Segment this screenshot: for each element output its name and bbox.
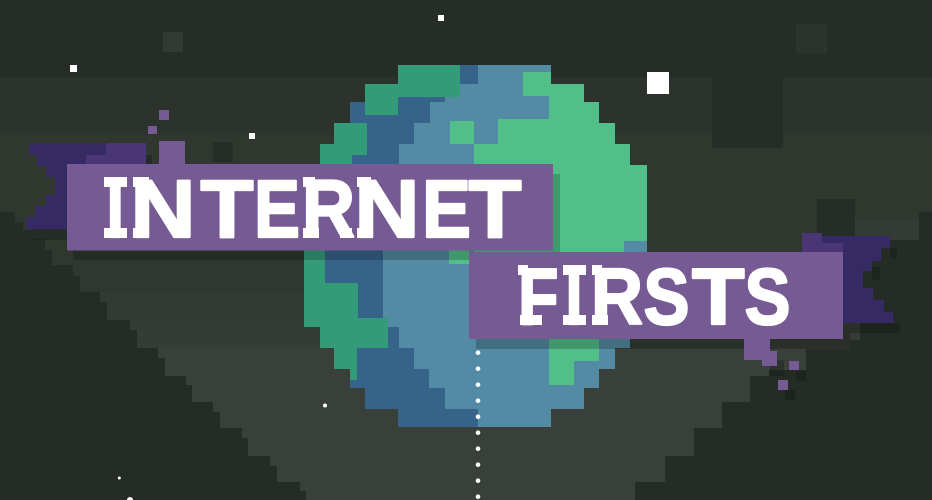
heading: INTERNET: R <box>302 164 355 255</box>
banner: INTERNET <box>67 164 553 250</box>
heading: FIRSTS: I <box>566 252 582 341</box>
banner drop shadows <box>33 155 900 400</box>
heading: FIRSTS: S <box>644 252 690 341</box>
heading: INTERNET: T <box>468 164 522 255</box>
heading: FIRSTS: T <box>692 252 745 341</box>
pixel globe <box>304 65 647 427</box>
heading: INTERNET <box>104 164 522 255</box>
left ribbon tail <box>26 143 146 229</box>
dotted timeline line <box>476 350 480 499</box>
right banner pixels <box>744 339 799 390</box>
heading: FIRSTS: S <box>744 252 790 341</box>
heading: INTERNET: T <box>200 164 254 255</box>
stars <box>70 15 669 500</box>
heading: INTERNET: E <box>422 164 471 255</box>
heading: FIRSTS <box>518 252 790 341</box>
right ribbon tail <box>802 233 893 323</box>
heading: INTERNET: N <box>130 164 196 255</box>
heading: INTERNET: E <box>254 164 300 255</box>
banner: FIRSTS <box>469 252 843 339</box>
left banner pixels <box>148 110 185 164</box>
heading: FIRSTS: R <box>591 252 643 341</box>
heading: FIRSTS: F <box>518 252 558 341</box>
heading: INTERNET: N <box>354 164 420 255</box>
heading: INTERNET: I <box>106 164 124 255</box>
